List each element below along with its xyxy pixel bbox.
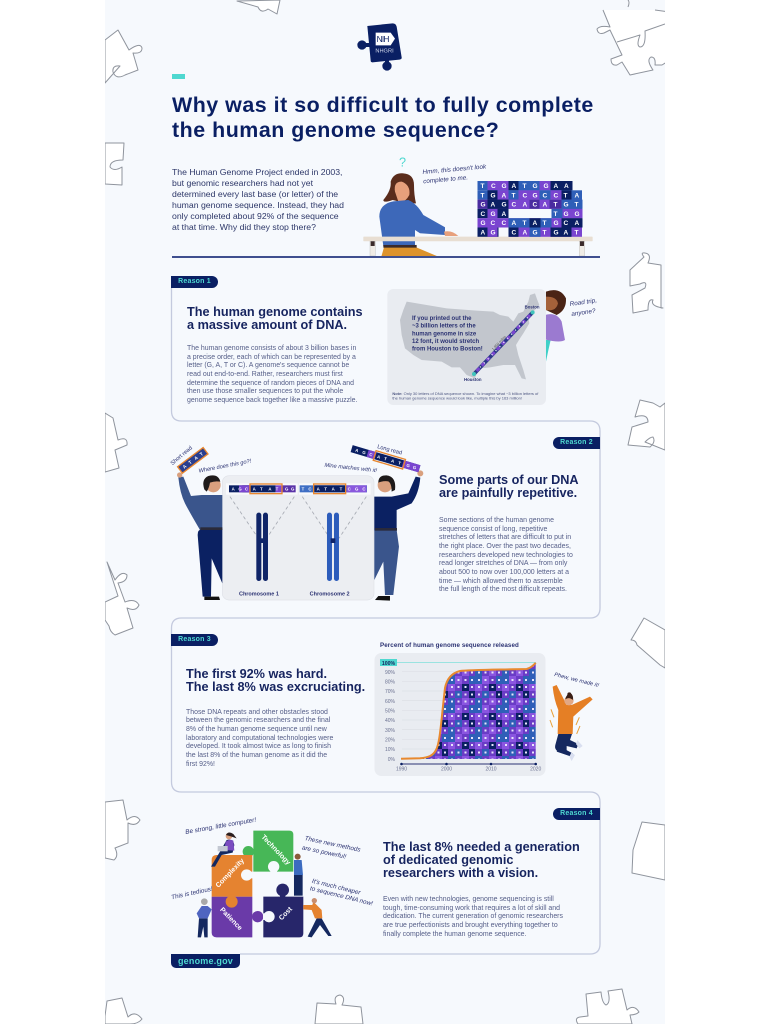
- body: Reason 1: [187, 344, 357, 404]
- dashed guides: [230, 497, 366, 538]
- person on left: [197, 898, 212, 937]
- label short read: Short read: [170, 445, 194, 467]
- heading: Reason 1: The human genome contains: [187, 304, 363, 318]
- intro text: [172, 166, 344, 232]
- title: [172, 93, 594, 142]
- x-axis labels: 1990: [396, 766, 407, 772]
- x-axis labels: [396, 766, 541, 772]
- piece: purple patience: [212, 897, 263, 937]
- body: Reason 1: The human genome consists of about 3 billion bases in: [187, 345, 356, 352]
- handwritten quotes: Be strong, little computer!: [185, 817, 257, 836]
- map callout text: If you printed out the: [412, 316, 472, 322]
- long read strip: [350, 444, 421, 474]
- body: Reason 3: laboratory and computational technologies were: [186, 735, 333, 742]
- intro text: only completed about 92% of the sequence: [172, 211, 339, 221]
- read strip 2: [299, 483, 371, 495]
- handwritten quotes: These new methods: [304, 835, 362, 854]
- heading: Reason 1: a massive amount of DNA.: [187, 318, 347, 332]
- long read strip: AGCATATGG: [355, 448, 418, 471]
- body: Reason 2: Some sections of the human genome: [439, 517, 554, 524]
- y-axis gridlines: [402, 672, 536, 749]
- piece: navy cost: Cost: [278, 906, 294, 922]
- tag: Reason 2: [553, 437, 600, 449]
- piece: green technology: [243, 831, 293, 872]
- short read strip: [178, 448, 208, 473]
- tag: Reason 4: Reason 4: [560, 810, 593, 817]
- tag: Reason 4: [553, 808, 600, 820]
- tag: Reason 1: [171, 276, 218, 288]
- body: Reason 3: 8% of the human genome sequence until new: [186, 726, 327, 733]
- body: Reason 4: finally complete the human genome sequence.: [383, 931, 526, 938]
- chromosome labels: [239, 591, 350, 597]
- heading: Reason 1: [187, 304, 363, 332]
- body: Reason 2: time — which allowed them to assemble: [439, 578, 563, 585]
- piece: green technology: Technology: [260, 834, 292, 867]
- sequence grid with gaps: GAGCACATGT: [480, 202, 578, 209]
- heading: Reason 3: The last 8% was excruciating.: [186, 680, 365, 694]
- sequence grid with gaps: TGG: [554, 211, 580, 218]
- scientist right: [374, 470, 423, 601]
- x-axis: [401, 763, 536, 765]
- body: Reason 1: read out end-to-end. Rather, researchers must first: [187, 371, 343, 378]
- y-axis labels: 80%: [385, 680, 396, 686]
- x-axis labels: 2020: [530, 766, 541, 772]
- body: Reason 1: then use those smaller sequences to put the whole: [187, 388, 343, 395]
- NIH NHGRI logo: NHGRI: [375, 48, 394, 54]
- body: Reason 1: genome sequence back together like a massive puzzle.: [187, 397, 357, 404]
- tag: Reason 3: [171, 634, 218, 646]
- route labels: Houston: [464, 377, 482, 382]
- label long read: [324, 444, 403, 474]
- piece: orange complexity: [212, 855, 253, 908]
- heading: Reason 3: [186, 666, 365, 694]
- person in blue: [294, 854, 303, 896]
- person pushing: [303, 898, 332, 937]
- footer tag: genome.gov: genome.gov: [178, 956, 233, 966]
- y-axis labels: 40%: [385, 718, 396, 724]
- tag: Reason 3: Reason 3: [178, 636, 211, 643]
- y-axis labels: 10%: [385, 747, 396, 753]
- piece: orange complexity: Complexity: [215, 857, 246, 889]
- route labels: Boston: [525, 305, 540, 310]
- route labels: 1,850 miles: [491, 335, 507, 351]
- body: Reason 2: read longer stretches of DNA — from only: [439, 560, 567, 567]
- handwritten quotes: to sequence DNA now!: [309, 885, 374, 908]
- chromosome labels: Chromosome 1: [239, 591, 279, 597]
- footer tag: genome.gov: [171, 954, 240, 968]
- handwritten quotes: are so powerful!: [301, 844, 347, 861]
- body: Reason 2: researchers developed new technologies to: [439, 552, 573, 559]
- map note: Note: Only 30 letters of DNA sequence shown. To imagine what ~3 billion letters of: [392, 391, 538, 396]
- body: Reason 4: [383, 896, 563, 938]
- DNA route line: [472, 310, 535, 376]
- body: Reason 2: about 500 to now over 100,000 letters at a: [439, 569, 569, 576]
- intro text: human genome sequence. Instead, they had: [172, 200, 344, 210]
- body: Reason 2: the right place. Over the past two decades,: [439, 543, 571, 550]
- chromosome labels: Chromosome 2: [310, 591, 350, 597]
- chart title: Percent of human genome sequence released: [380, 642, 519, 649]
- y-axis labels: [385, 670, 396, 763]
- label long read: Mine matches with it!: [324, 463, 378, 474]
- label short read: Where does this go?!: [198, 458, 252, 475]
- short read strip: ATAT: [182, 451, 204, 470]
- tag: Reason 1: Reason 1: [178, 278, 211, 285]
- y-axis labels: 50%: [385, 708, 396, 714]
- map callout text: ~3 billion letters of the: [412, 324, 476, 330]
- heading: Reason 4: [383, 840, 580, 880]
- body: Reason 1: a precise order, each of which can be represented by a: [187, 354, 356, 361]
- label short read: [170, 445, 252, 475]
- body: Reason 3: first 92%!: [186, 761, 215, 768]
- body: Reason 2: sequence consist of long, repetitive: [439, 526, 547, 533]
- 100 percent marker: [380, 659, 536, 667]
- sequence grid with gaps: AG: [480, 230, 496, 236]
- x-axis labels: 2010: [485, 766, 497, 772]
- body: Reason 3: the last 8% of the human genome as it did the: [186, 752, 327, 759]
- body: Reason 3: [186, 708, 334, 768]
- read strip 1: [226, 483, 298, 495]
- title: the human genome sequence?: [172, 118, 499, 142]
- intro text: The Human Genome Project ended in 2003,: [172, 166, 342, 176]
- handwritten quotes: This is tedious!: [171, 886, 214, 901]
- y-axis labels: 20%: [385, 738, 396, 744]
- background puzzle pieces: [105, 0, 665, 1024]
- body: Reason 1: determine the sequence of random pieces of DNA and: [187, 380, 354, 387]
- intro text: at that time. Why did they stop there?: [172, 222, 316, 232]
- body: Reason 4: tough, time-consuming work that requires a lot of skill and: [383, 905, 560, 912]
- heading: Reason 2: are painfully repetitive.: [439, 486, 577, 500]
- body: Reason 1: letter (G, A, T or C). A genome's sequence cannot be: [187, 362, 349, 369]
- sequence grid with gaps: CAGTGAT: [512, 230, 578, 236]
- body: Reason 2: the full length of the most difficult repeats.: [439, 586, 567, 593]
- speech: hmm: Hmm, this doesn't look: [422, 163, 487, 176]
- 100 percent marker: 100%: [382, 661, 396, 667]
- y-axis labels: 30%: [385, 728, 396, 734]
- map callout text: human genome in size: [412, 331, 477, 337]
- figure: jumping researcher: Phew, we made it!: [553, 672, 600, 689]
- read strip 2: TCATATCGC: [302, 487, 365, 492]
- filled area: [401, 663, 536, 759]
- sequence grid with gaps: GCCATATGCA: [480, 220, 580, 227]
- y-axis labels: 60%: [385, 699, 396, 705]
- figure: road trip person behind map: anyone?: [571, 308, 596, 318]
- heading: Reason 3: The first 92% was hard.: [186, 666, 327, 680]
- piece: purple patience: Patience: [218, 907, 243, 932]
- heading: Reason 4: researchers with a vision.: [383, 866, 538, 880]
- heading: Reason 2: [439, 472, 579, 500]
- NIH NHGRI logo: NIH: [377, 34, 389, 44]
- US map: [400, 293, 539, 379]
- route labels: [464, 305, 540, 382]
- baseline rule: [172, 256, 600, 258]
- speech: hmm: complete to me.: [423, 174, 468, 185]
- body: Reason 3: developed. It took almost twice as long to finish: [186, 743, 331, 750]
- figure: road trip person behind map: Road trip,: [569, 297, 598, 308]
- chromosome panel: [222, 476, 374, 600]
- orange curve: [401, 663, 536, 759]
- sequence grid with gaps: TGATCGCCTA: [480, 192, 580, 199]
- body: Reason 4: dedication. The current generation of genomic researchers: [383, 913, 563, 920]
- y-axis labels: 90%: [385, 670, 396, 676]
- heading: Reason 2: Some parts of our DNA: [439, 472, 579, 486]
- piece: navy cost: [263, 884, 303, 937]
- body: Reason 4: Even with new technologies, genome sequencing is still: [383, 896, 554, 903]
- map callout text: from Houston to Boston!: [412, 346, 483, 352]
- tag: Reason 2: Reason 2: [560, 439, 593, 446]
- researcher figure: [379, 173, 458, 257]
- label long read: Long read: [376, 444, 403, 457]
- chromosome 2: [327, 513, 339, 581]
- question mark: ?: [399, 156, 406, 170]
- chromosome 1: [256, 513, 268, 581]
- person with laptop: [211, 833, 237, 867]
- body: Reason 4: are true perfectionists and brought everything together to: [383, 922, 558, 929]
- handwritten quotes: It's much cheaper: [311, 878, 362, 897]
- intro text: but genomic researchers had not yet: [172, 178, 313, 188]
- map note: the human genome sequence would look like, multiple this by 163 million!: [392, 396, 522, 401]
- y-axis labels: 0%: [388, 757, 396, 763]
- body: Reason 2: stretches of letters that are difficult to put in: [439, 534, 571, 541]
- scientist left: [177, 472, 222, 600]
- body: Reason 2: [439, 516, 573, 593]
- title: Why was it so difficult to fully complete: [172, 93, 594, 117]
- handwritten quotes: [171, 817, 374, 908]
- map callout text: 12 font, it would stretch: [412, 339, 480, 345]
- heading: Reason 4: of dedicated genomic: [383, 853, 513, 867]
- table: [363, 237, 593, 256]
- heading: Reason 4: The last 8% needed a generation: [383, 840, 580, 854]
- read strip 1: AGCATATGG: [232, 487, 295, 492]
- sequence grid with gaps: CGA: [480, 211, 506, 218]
- x-axis labels: 2000: [441, 766, 452, 772]
- teal accent bar: [172, 74, 185, 79]
- y-axis labels: 70%: [385, 689, 396, 695]
- body: Reason 3: between the genomic researchers and the final: [186, 717, 330, 724]
- intro text: determined every last base (or letter) of the: [172, 189, 338, 199]
- speech: hmm: [422, 163, 487, 185]
- body: Reason 3: Those DNA repeats and other obstacles stood: [186, 708, 328, 716]
- sequence grid with gaps: TCGATGGAA: [480, 183, 569, 190]
